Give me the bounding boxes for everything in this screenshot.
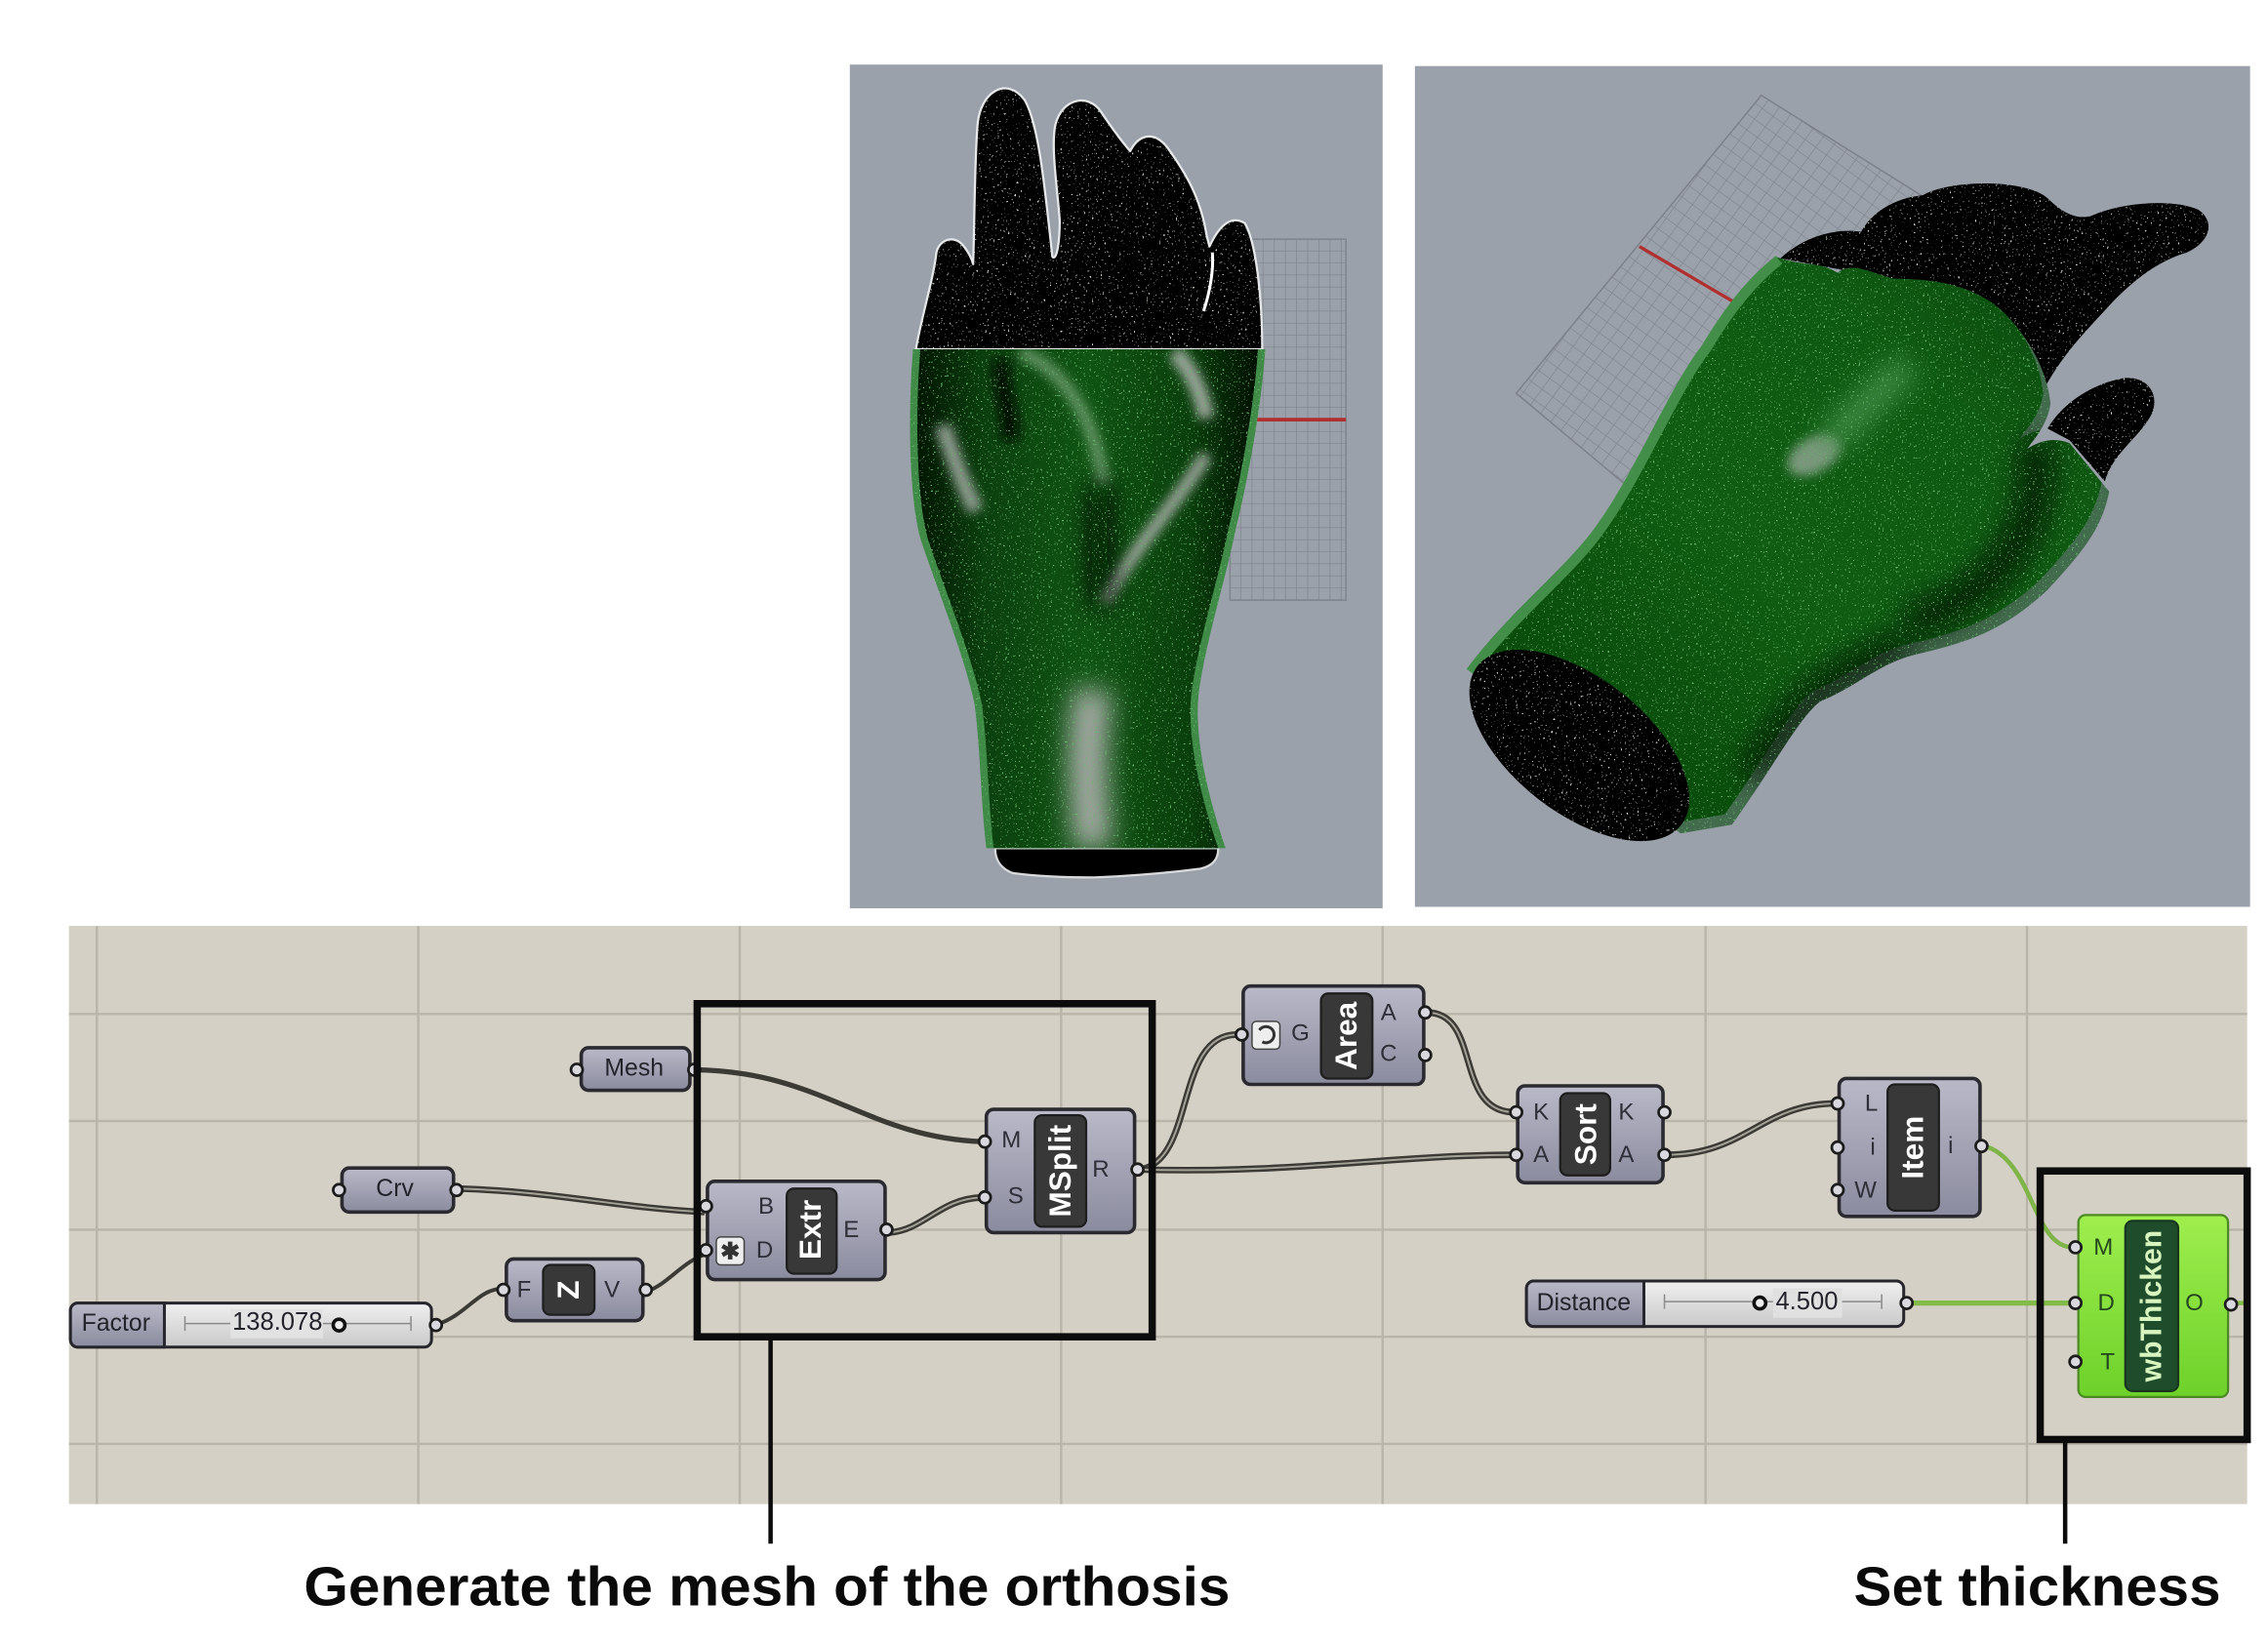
panel: Grasshopper definition canvas — [69, 926, 2248, 1504]
node: Z unit vector: V — [604, 1277, 620, 1303]
reference grid plane — [1230, 239, 1346, 600]
black hand fingers — [1776, 177, 2216, 484]
node: wbThicken component: T — [2100, 1348, 2115, 1375]
node: Z unit vector — [498, 1259, 652, 1321]
node: MSplit component: M — [1001, 1127, 1021, 1153]
node: Area component: C — [1380, 1040, 1397, 1066]
node: Mesh parameter — [571, 1048, 700, 1091]
node: Sort component — [1511, 1086, 1671, 1182]
node: Factor slider — [70, 1303, 442, 1347]
node: Crv parameter: Crv — [376, 1176, 414, 1202]
node: Mesh parameter: Mesh — [604, 1055, 664, 1081]
node: Area component: G — [1291, 1020, 1310, 1046]
node: Sort component: K — [1533, 1100, 1549, 1126]
caption: Set thickness: Set thickness — [1854, 1555, 2221, 1617]
node: Crv parameter — [333, 1168, 463, 1212]
node: Z unit vector: Z — [550, 1280, 586, 1300]
reference grid plane — [1517, 96, 1925, 506]
node: Item component — [1832, 1078, 1987, 1217]
node: Extr component: B — [758, 1193, 774, 1220]
node: Extr component: ✱ — [720, 1238, 740, 1264]
black cut end of forearm — [1470, 650, 1689, 841]
panel: perspective view of hand with orthosis — [1415, 66, 2250, 907]
node: Item component: i — [1870, 1135, 1876, 1161]
node: Factor slider: Factor — [82, 1310, 150, 1337]
node: Sort component: A — [1618, 1141, 1634, 1168]
node: wbThicken component: O — [2185, 1290, 2204, 1316]
green orthosis perspective — [1460, 247, 2114, 839]
node: Item component: L — [1865, 1091, 1878, 1117]
node: MSplit component: R — [1092, 1156, 1110, 1182]
node: Factor slider: 138.078 — [232, 1308, 322, 1336]
node: MSplit component: MSplit — [1042, 1124, 1077, 1218]
node: Item component: i — [1948, 1133, 1954, 1159]
node: Area component — [1235, 986, 1431, 1084]
node: Item component: W — [1854, 1177, 1877, 1203]
node: MSplit component: S — [1008, 1182, 1024, 1209]
leader line to thickness caption — [2064, 1439, 2067, 1543]
callout box: mesh generation group — [697, 1004, 1153, 1337]
light green edge strip — [1471, 260, 1779, 672]
node: Extr component: Extr — [792, 1200, 828, 1260]
node: wbThicken component: wbThicken — [2135, 1230, 2167, 1382]
black hand fingers — [910, 81, 1270, 352]
node: Sort component: Sort — [1567, 1103, 1602, 1165]
node: Distance slider — [1526, 1281, 1913, 1327]
node: Area component: A — [1381, 999, 1397, 1025]
node: Distance slider: Distance — [1537, 1290, 1631, 1316]
panel: front view of hand with orthosis — [850, 64, 1383, 908]
caption: Generate the mesh of the orthosis: Generate the mesh of the orthosis — [304, 1555, 1230, 1617]
callout box: thickness group — [2041, 1171, 2248, 1439]
node: wbThicken component: D — [2098, 1290, 2115, 1316]
leader line to mesh caption — [769, 1337, 772, 1543]
green orthosis front — [907, 346, 1271, 853]
node: MSplit component — [979, 1109, 1144, 1232]
node: Area component: Area — [1328, 1001, 1363, 1070]
black forearm base — [995, 848, 1218, 877]
node: wbThicken component — [2070, 1215, 2237, 1397]
node: Extr component: E — [843, 1217, 859, 1243]
node: Sort component: A — [1533, 1141, 1549, 1168]
wires between components — [436, 1013, 2248, 1325]
node: wbThicken component: M — [2093, 1234, 2113, 1261]
node: Extr component — [700, 1181, 892, 1280]
node: Sort component: K — [1618, 1100, 1634, 1126]
node: Z unit vector: F — [517, 1277, 531, 1303]
node: Distance slider: 4.500 — [1775, 1288, 1838, 1315]
node: Extr component: D — [756, 1237, 773, 1263]
node: Item component: Item — [1895, 1116, 1930, 1180]
